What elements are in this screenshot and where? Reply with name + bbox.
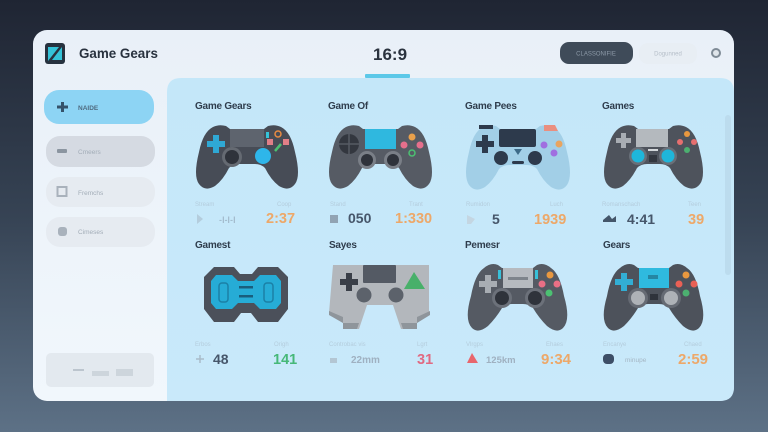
card: Games — [602, 101, 704, 228]
card: Gears: Chaed — [684, 342, 702, 348]
card: Gears: Encanye — [603, 342, 627, 348]
controller 1 — [196, 125, 298, 189]
card: Game Of: Game Of — [328, 101, 369, 112]
card: Pemesr: Ehaes — [546, 342, 563, 348]
content panel — [167, 78, 734, 401]
card: Games: Teen — [688, 202, 701, 208]
nav item: active: NAIDE — [78, 105, 99, 112]
card: Gamest: Origh — [274, 342, 289, 348]
card: Gamest: Gamest — [195, 240, 231, 251]
scrollbar — [725, 115, 731, 275]
card: Sayes: Sayes — [329, 240, 357, 251]
icon: app logo — [45, 43, 65, 64]
nav item: third — [46, 177, 155, 207]
card: Games: 39 — [688, 212, 704, 228]
app window — [33, 30, 734, 401]
nav item: second — [46, 136, 155, 167]
card: Gamest — [195, 240, 297, 368]
card: Game Gears: -I-I-I — [219, 215, 236, 225]
card: Pemesr: Vlrgps — [466, 342, 483, 348]
card: Game Pees: 1939 — [534, 212, 566, 228]
card: Game Pees: Rumidon — [466, 202, 490, 208]
controller 3 — [466, 125, 570, 190]
heading underline — [365, 74, 410, 78]
controller 8 — [604, 264, 703, 331]
card: Game Gears — [195, 101, 298, 227]
light button — [639, 43, 697, 64]
card: Gamest: 141 — [273, 352, 297, 368]
icon: settings circle — [712, 49, 720, 57]
controller 5 — [204, 267, 288, 322]
card: Game Pees: Game Pees — [465, 101, 517, 112]
card: Sayes: 22mm — [351, 355, 380, 366]
card: Gamest: 48 — [213, 351, 229, 367]
title: Game Gears — [79, 46, 158, 61]
nav item: third: Fremchs — [78, 190, 104, 197]
aspect ratio heading: 16:9 — [373, 45, 407, 64]
card: Gears: Gears — [603, 240, 631, 251]
card: Game Of: 1:330 — [395, 211, 432, 227]
nav item: active — [44, 90, 154, 124]
sidebar footer box — [46, 353, 154, 387]
card: Game Of: 050 — [348, 210, 372, 226]
card: Gamest: Erbos — [195, 342, 211, 348]
card: Games: 4:41 — [627, 211, 655, 227]
card: Game Of: Stand — [330, 202, 346, 208]
dark button — [560, 42, 633, 64]
card: Pemesr: 9:34 — [541, 351, 572, 368]
nav item: fourth — [46, 217, 155, 247]
nav item: fourth: Cimeses — [78, 229, 104, 236]
light button: Dogunned — [654, 52, 682, 58]
controller 6 — [329, 265, 430, 329]
card: Game Pees: Luch — [550, 202, 563, 208]
dark button: CLASSONIFIE — [576, 52, 616, 58]
card: Sayes: Controbac vis — [329, 342, 366, 348]
card: Game Of: Trant — [409, 202, 423, 208]
card: Gears: 2:59 — [678, 351, 708, 368]
card: Game Gears: Coop — [277, 202, 292, 208]
card: Game Pees — [465, 101, 570, 228]
controller 2 — [329, 125, 432, 189]
controller 7 — [468, 264, 567, 331]
card: Game Of — [328, 101, 432, 227]
card: Game Pees: 5 — [492, 211, 500, 227]
card: Sayes: 31 — [417, 352, 433, 368]
card: Sayes: Lgrt — [417, 342, 428, 348]
card: Pemesr — [465, 240, 572, 368]
card: Pemesr: 125km — [486, 355, 516, 366]
card: Game Gears: Stream — [195, 202, 214, 208]
card: Games: Romanschach — [602, 202, 640, 208]
card: Game Gears: Game Gears — [195, 101, 252, 112]
card: Sayes — [329, 240, 433, 368]
card: Pemesr: Pemesr — [465, 240, 500, 251]
nav item: second: Cmeers — [78, 149, 102, 156]
card: Game Gears: 2:37 — [266, 211, 295, 227]
card: Gears — [603, 240, 708, 368]
card: Gears: minupe — [625, 357, 647, 364]
card: Games: Games — [602, 101, 635, 112]
controller 4 — [604, 125, 703, 189]
